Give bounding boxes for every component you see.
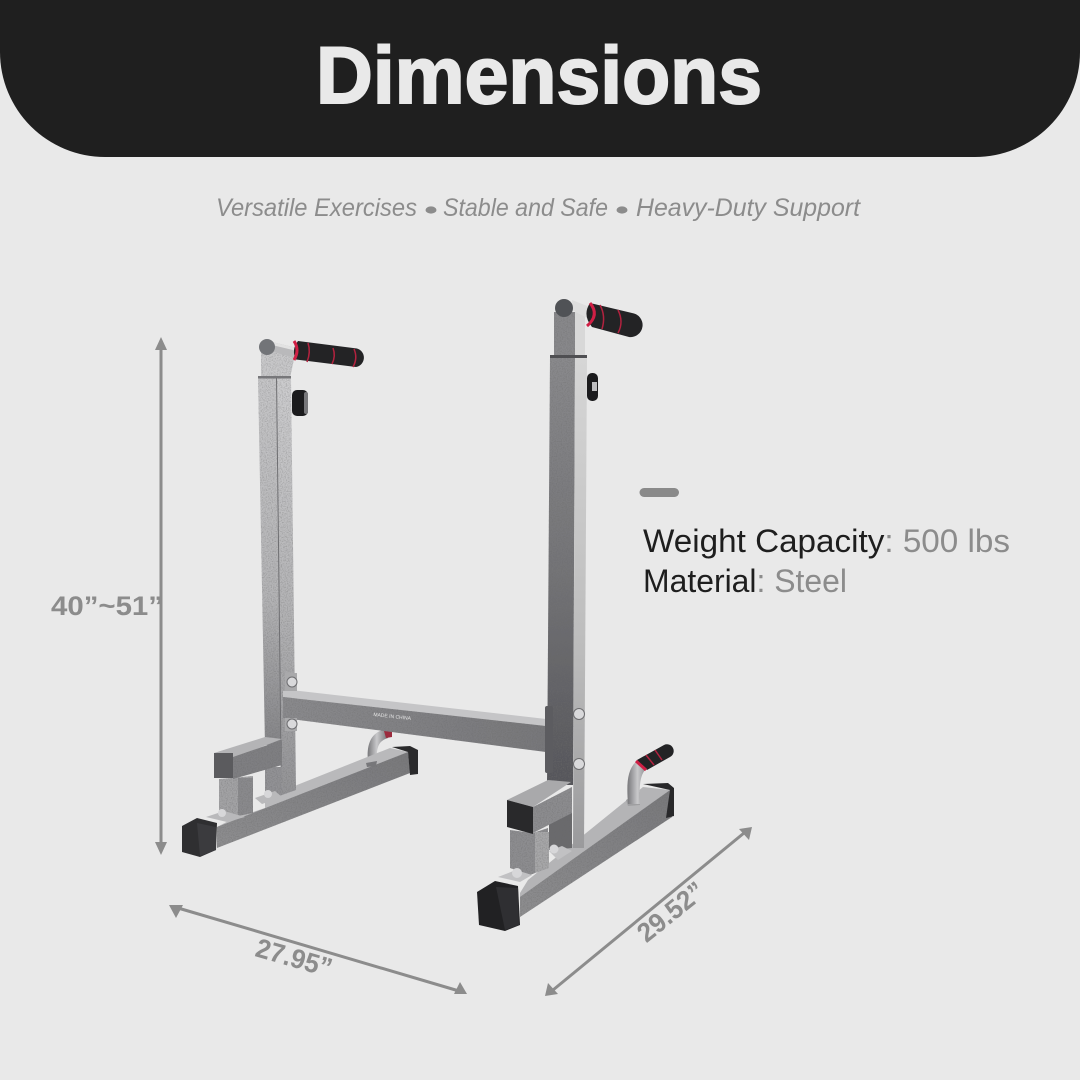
- height label: 40”~51”: [51, 591, 163, 621]
- right end cap: [555, 299, 573, 317]
- right step block: [498, 780, 572, 882]
- made in china mark: MADE IN CHINA: [373, 712, 412, 722]
- left frame far handle: [368, 729, 392, 763]
- tagline: Heavy-Duty Support: [636, 194, 861, 222]
- depth arrow: [545, 827, 752, 996]
- right floor handle: [627, 744, 674, 804]
- material: Material: Steel: [643, 563, 847, 599]
- weight capacity: Weight Capacity : 500 lbs: [643, 523, 1010, 559]
- width label: 27.95”: [252, 933, 336, 983]
- spec accent bar: [640, 488, 679, 497]
- specifications: [643, 523, 1010, 599]
- height arrow: [155, 337, 167, 855]
- right grip: [572, 300, 643, 337]
- left upright: [258, 345, 296, 795]
- dip bar station product: [182, 299, 674, 931]
- right upright: [547, 312, 587, 848]
- right knob: [587, 373, 598, 401]
- right bolts: [574, 708, 584, 770]
- crossbar: [283, 690, 546, 752]
- left grip: [270, 341, 364, 367]
- width arrow: [169, 905, 467, 994]
- left bolts: [285, 673, 297, 731]
- tagline: Stable and Safe: [443, 194, 608, 222]
- left base rail: [182, 746, 418, 857]
- left end cap: [259, 339, 275, 355]
- right front foot: [477, 881, 520, 931]
- right plate: [545, 706, 553, 773]
- right base rail: [520, 783, 674, 917]
- left knob: [292, 390, 308, 416]
- left step block: [206, 737, 282, 822]
- depth label: 29.52”: [631, 876, 711, 948]
- tagline: [216, 194, 861, 222]
- tagline: Versatile Exercises: [216, 194, 417, 222]
- title: Dimensions: [316, 31, 762, 121]
- header banner: [0, 0, 1080, 157]
